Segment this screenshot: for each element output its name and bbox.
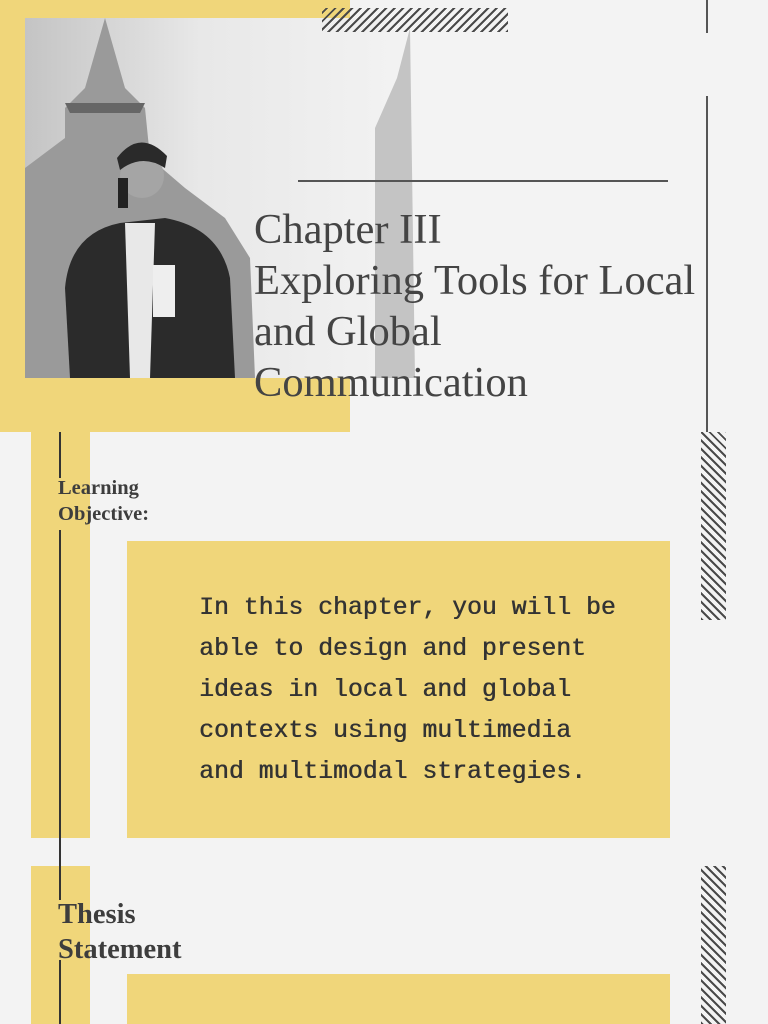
photo: man on phone: [25, 18, 415, 378]
heading: thesis statement: [58, 899, 182, 965]
title: Exploring Tools for Local: [254, 257, 695, 304]
hatch: top: [322, 8, 508, 32]
right vertical line: [706, 0, 708, 33]
hatch: right strips: [701, 432, 726, 620]
title rule: [298, 180, 668, 182]
heading: thesis statement: Statement: [58, 934, 181, 965]
left yellow strips: [31, 432, 90, 838]
heading: thesis statement: Thesis: [58, 899, 136, 930]
title: Chapter III: [254, 206, 442, 253]
panel: thesis statement: [127, 974, 670, 1024]
heading: learning objective: Objective:: [58, 503, 149, 525]
heading: learning objective: Learning: [58, 477, 139, 499]
panel: learning objective text: [127, 541, 670, 838]
title: [254, 206, 695, 406]
heading: learning objective: [58, 477, 149, 525]
left vertical line: [59, 432, 61, 478]
yellow frame block: [0, 0, 350, 432]
panel: learning objective text: In this chapter, you will be able to design and present ideas in local and global contexts using multimedia and multimodal strategies.: [199, 594, 616, 786]
title: and Global: [254, 308, 442, 355]
title: Communication: [254, 359, 528, 406]
